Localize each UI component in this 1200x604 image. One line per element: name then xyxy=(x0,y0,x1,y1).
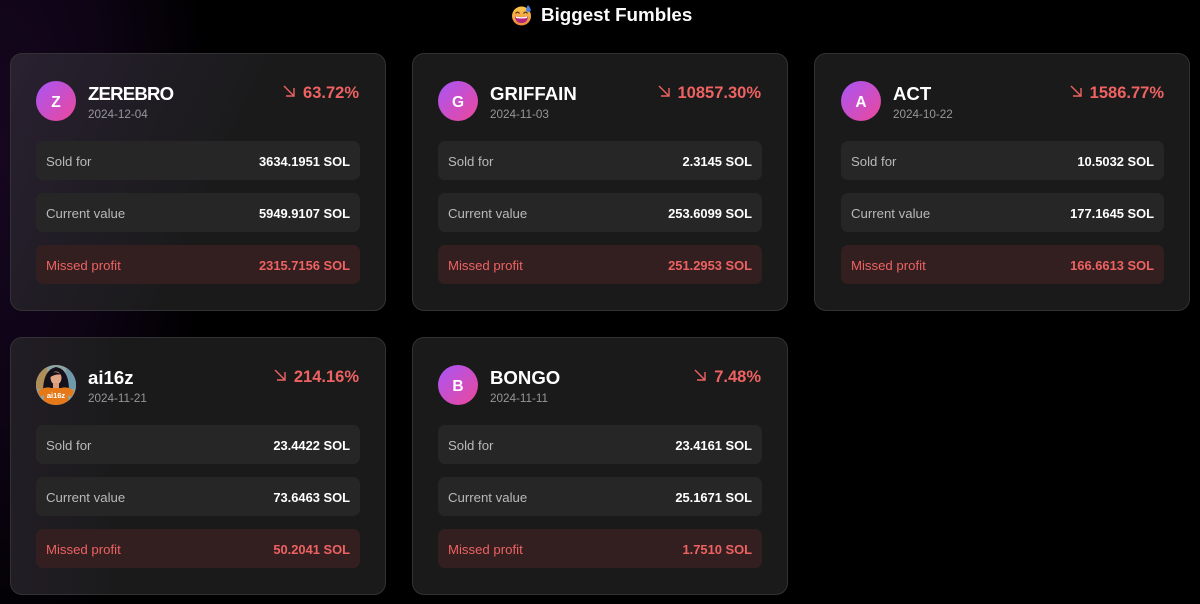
row: current value xyxy=(841,193,1164,232)
row: current value: Current value xyxy=(46,490,125,505)
date: 2024-12-04 xyxy=(88,108,148,121)
avatar: Z xyxy=(36,81,76,121)
date: 2024-11-11 xyxy=(490,392,548,405)
change percentage: 1586.77% xyxy=(1090,84,1164,102)
row: missed profit: Missed profit xyxy=(448,542,523,557)
row: sold for xyxy=(36,141,360,180)
row: sold for: Sold for xyxy=(448,154,493,169)
row: missed profit: 1.7510 SOL xyxy=(682,542,752,557)
row: missed profit: Missed profit xyxy=(851,258,926,273)
date: 2024-10-22 xyxy=(893,108,953,121)
avatar: ai16z illustrated character: ai16z xyxy=(47,391,65,400)
panel: ACT xyxy=(814,53,1190,311)
token name: BONGO xyxy=(490,367,560,388)
token name: ACT xyxy=(893,83,931,104)
row: missed profit: 251.2953 SOL xyxy=(668,258,752,273)
row: sold for: 10.5032 SOL xyxy=(1077,154,1154,169)
panel: GRIFFAIN xyxy=(412,53,788,311)
row: current value: Current value xyxy=(851,206,930,221)
token name: ZEREBRO xyxy=(88,83,173,104)
row: sold for: Sold for xyxy=(46,438,91,453)
row: sold for: Sold for xyxy=(851,154,896,169)
row: sold for: 23.4422 SOL xyxy=(273,438,350,453)
row: sold for: 2.3145 SOL xyxy=(682,154,752,169)
row: sold for xyxy=(438,141,762,180)
row: current value: 177.1645 SOL xyxy=(1070,206,1154,221)
row: missed profit: 166.6613 SOL xyxy=(1070,258,1154,273)
token name: ai16z xyxy=(88,367,134,388)
row: current value: 73.6463 SOL xyxy=(273,490,350,505)
row: sold for: 3634.1951 SOL xyxy=(259,154,350,169)
row: current value: 25.1671 SOL xyxy=(675,490,752,505)
panel: ai16z xyxy=(10,337,386,595)
change percentage: 214.16% xyxy=(294,368,359,386)
row: missed profit xyxy=(438,245,762,284)
row: current value: 5949.9107 SOL xyxy=(259,206,350,221)
row: sold for xyxy=(438,425,762,464)
date: 2024-11-03 xyxy=(490,108,549,121)
row: current value xyxy=(438,193,762,232)
avatar: Z: Z xyxy=(51,94,61,111)
panel: ZEREBRO xyxy=(10,53,386,311)
avatar: ai16z illustrated character xyxy=(36,365,76,405)
title: Biggest Fumbles xyxy=(541,4,692,25)
change percentage: 10857.30% xyxy=(678,84,761,102)
avatar: A: A xyxy=(855,94,867,111)
icon: grinning face with sweat xyxy=(512,5,531,26)
row: missed profit: Missed profit xyxy=(448,258,523,273)
change percentage: 7.48% xyxy=(714,368,761,386)
date: 2024-11-21 xyxy=(88,392,147,405)
row: current value: Current value xyxy=(448,490,527,505)
avatar: G: G xyxy=(452,94,464,111)
change percentage: 63.72% xyxy=(303,84,359,102)
row: current value: Current value xyxy=(46,206,125,221)
row: missed profit xyxy=(438,529,762,568)
row: sold for: 23.4161 SOL xyxy=(675,438,752,453)
avatar: B: B xyxy=(452,378,464,395)
row: current value: Current value xyxy=(448,206,527,221)
avatar: G xyxy=(438,81,478,121)
row: missed profit: Missed profit xyxy=(46,258,121,273)
row: current value xyxy=(438,477,762,516)
avatar: A xyxy=(841,81,881,121)
avatar: B xyxy=(438,365,478,405)
row: sold for xyxy=(36,425,360,464)
row: current value xyxy=(36,193,360,232)
row: sold for: Sold for xyxy=(448,438,493,453)
row: sold for xyxy=(841,141,1164,180)
row: missed profit: Missed profit xyxy=(46,542,121,557)
row: current value: 253.6099 SOL xyxy=(668,206,752,221)
row: sold for: Sold for xyxy=(46,154,91,169)
row: current value xyxy=(36,477,360,516)
row: missed profit xyxy=(36,245,360,284)
token name: GRIFFAIN xyxy=(490,83,577,104)
row: missed profit: 50.2041 SOL xyxy=(273,542,350,557)
row: missed profit: 2315.7156 SOL xyxy=(259,258,350,273)
row: missed profit xyxy=(841,245,1164,284)
panel: BONGO xyxy=(412,337,788,595)
row: missed profit xyxy=(36,529,360,568)
